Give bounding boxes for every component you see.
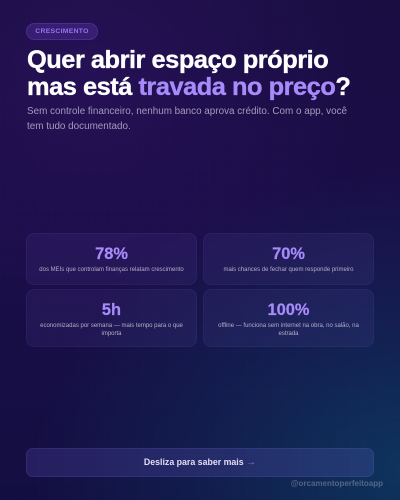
stat card: 5h: 5h — [102, 301, 121, 319]
stat card: 5h: economizadas por semana — mais tempo para o que — [40, 323, 183, 329]
subtitle text: Sem controle financeiro, nenhum banco aprova crédito. Com o app, você — [27, 106, 347, 117]
stat card: 78%: 78% — [95, 245, 128, 263]
stat card: 100% — [203, 289, 374, 347]
stat card: 78%: dos MEIs que controlam finanças relatam crescimento — [39, 267, 184, 273]
stat card: 5h — [26, 289, 197, 347]
stat card: 100%: estrada — [278, 331, 298, 337]
call to action bar: Desliza para saber mais → — [144, 457, 256, 468]
badge: crescimento — [26, 23, 98, 40]
title — [27, 46, 350, 100]
social handle: @orcamentoperfeitoapp — [291, 479, 383, 488]
stat card: 70%: mais chances de fechar quem responde primeiro — [223, 267, 354, 273]
stat card: 5h: importa — [101, 331, 122, 337]
badge: crescimento: CRESCIMENTO — [35, 28, 89, 35]
subtitle text: tem tudo documentado. — [27, 120, 131, 132]
stat card: 100%: 100% — [268, 301, 309, 319]
title: Quer abrir espaço próprio — [27, 46, 328, 74]
stat card: 70%: 70% — [272, 245, 305, 263]
stat card: 100%: offline — funciona sem internet na obra, no salão, na — [218, 323, 359, 329]
call to action bar — [26, 448, 374, 477]
stat card: 78% — [26, 233, 197, 285]
subtitle text — [27, 106, 347, 132]
title: mas está travada no preço? — [27, 72, 350, 100]
stat card: 70% — [203, 233, 374, 285]
